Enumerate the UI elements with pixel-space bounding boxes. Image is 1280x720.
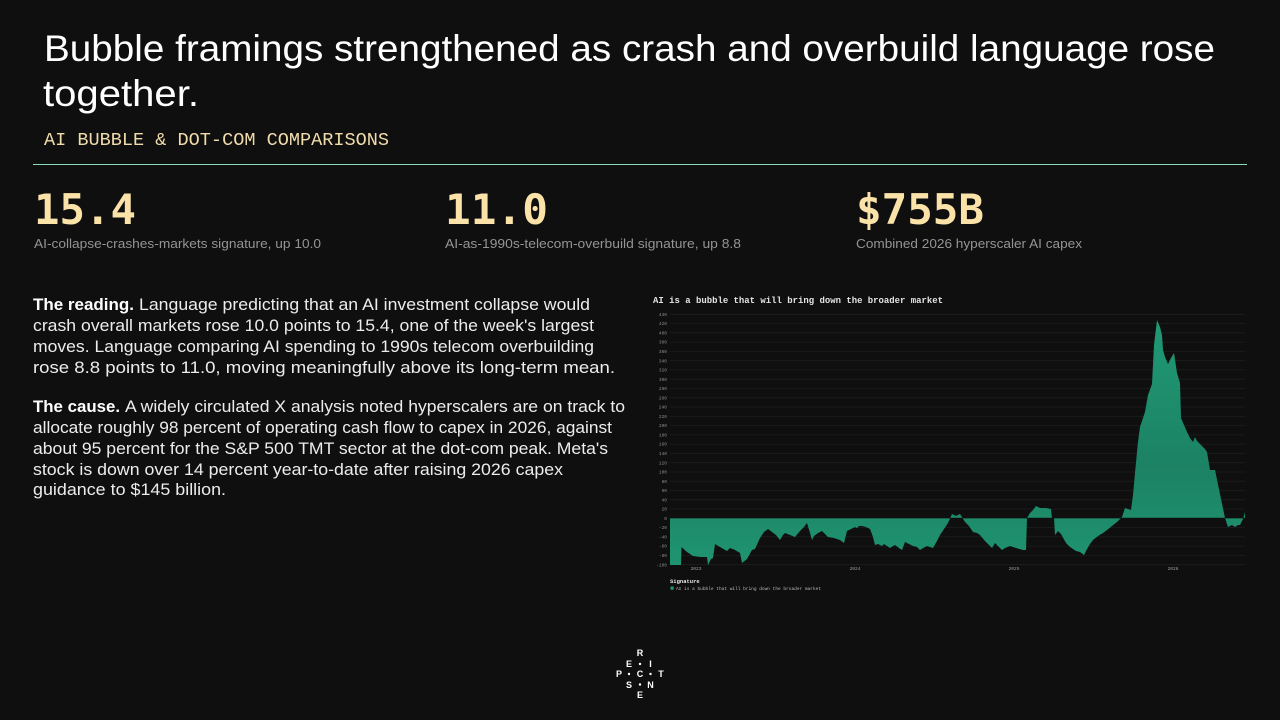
logo: Recepts compass mark: E [637,690,643,700]
y axis labels: 120 [659,460,667,466]
logo: Recepts compass mark: I [649,659,652,669]
y axis labels: 180 [659,432,667,438]
text block: the cause: A widely circulated X analysis noted hyperscalers are on track to [125,398,625,416]
x axis years: 2026 [1168,566,1179,572]
y axis labels: 260 [659,395,667,401]
legend [670,578,821,592]
title [43,28,1215,114]
text block: the cause: about 95 percent for the S&P 500 TMT sector at the dot-com peak. Meta's [33,440,608,458]
y axis labels: 300 [659,377,667,383]
y axis labels: 320 [659,368,667,374]
text block: the cause [33,398,625,499]
y axis labels: 380 [659,340,667,346]
x axis years [691,566,1179,572]
y axis labels: -100 [656,562,667,568]
x axis years: 2025 [1009,566,1020,572]
y axis labels: 220 [659,414,667,420]
stat: collapse signature [34,185,321,251]
y axis labels: 20 [662,507,667,513]
y axis labels: 360 [659,349,667,355]
logo: Recepts compass mark [616,648,664,700]
y axis labels: 140 [659,451,667,457]
legend: Signature [670,578,700,585]
legend: AI is a bubble that will bring down the broader market [676,586,821,592]
y axis labels: 440 [659,312,667,318]
y axis labels: -20 [659,525,667,531]
logo: Recepts compass mark: S [626,680,632,690]
subtitle: AI BUBBLE & DOT-COM COMPARISONS [44,130,389,151]
x axis years: 2024 [850,566,861,572]
y axis labels: 280 [659,386,667,392]
stat: hyperscaler capex [856,185,1083,251]
title: Bubble framings strengthened as crash and overbuild language rose [44,28,1215,69]
y axis labels: 200 [659,423,667,429]
text block: the cause: The cause. [33,398,120,416]
y axis labels: 40 [662,497,667,503]
logo: Recepts compass mark: P [616,669,622,679]
y axis labels: 0 [664,516,667,522]
stat: hyperscaler capex: Combined 2026 hyperscaler AI capex [856,237,1083,251]
y axis labels: 100 [659,470,667,476]
stat: telecom overbuild signature: 11.0 [445,185,548,234]
y axis labels: 80 [662,479,667,485]
stat: collapse signature: AI-collapse-crashes-markets signature, up 10.0 [34,237,321,251]
text block: the reading: Language predicting that an AI investment collapse would [139,296,590,314]
stat: collapse signature: 15.4 [34,185,136,234]
y axis labels: 400 [659,330,667,336]
y axis labels: -80 [659,553,667,559]
y axis labels: -40 [659,534,667,540]
logo: Recepts compass mark: T [658,669,664,679]
logo: Recepts compass mark: N [647,680,654,690]
text block: the reading: crash overall markets rose 10.0 points to 15.4, one of the week's largest [33,317,594,335]
y axis labels [656,312,667,568]
text block: the cause: allocate roughly 98 percent of operating cash flow to capex in 2026, against [33,419,612,437]
stat: hyperscaler capex: $755B [856,185,984,234]
y axis labels: -60 [659,544,667,550]
signature area [670,320,1245,565]
text block: the reading: rose 8.8 points to 11.0, moving meaningfully above its long-term mean. [33,359,615,377]
y axis labels: 160 [659,442,667,448]
text block: the reading: The reading. [33,296,134,314]
chart title: AI is a bubble that will bring down the broader market [653,295,943,306]
y axis labels: 420 [659,321,667,327]
title: together. [43,73,199,114]
y axis labels: 60 [662,488,667,494]
logo: Recepts compass mark: R [637,648,644,658]
logo: Recepts compass mark: C [637,669,644,679]
text block: the cause: stock is down over 14 percent year-to-date after raising 2026 capex [33,461,564,479]
stat: telecom overbuild signature [445,185,741,251]
text block: the reading [33,296,615,377]
y axis labels: 240 [659,405,667,411]
text block: the reading: moves. Language comparing AI spending to 1990s telecom overbuilding [33,338,594,356]
area chart [653,295,1245,592]
logo: Recepts compass mark: E [626,659,632,669]
y axis labels: 340 [659,358,667,364]
text block: the cause: guidance to $145 billion. [33,481,226,499]
stat: telecom overbuild signature: AI-as-1990s-telecom-overbuild signature, up 8.8 [445,237,741,251]
x axis years: 2023 [691,566,702,572]
